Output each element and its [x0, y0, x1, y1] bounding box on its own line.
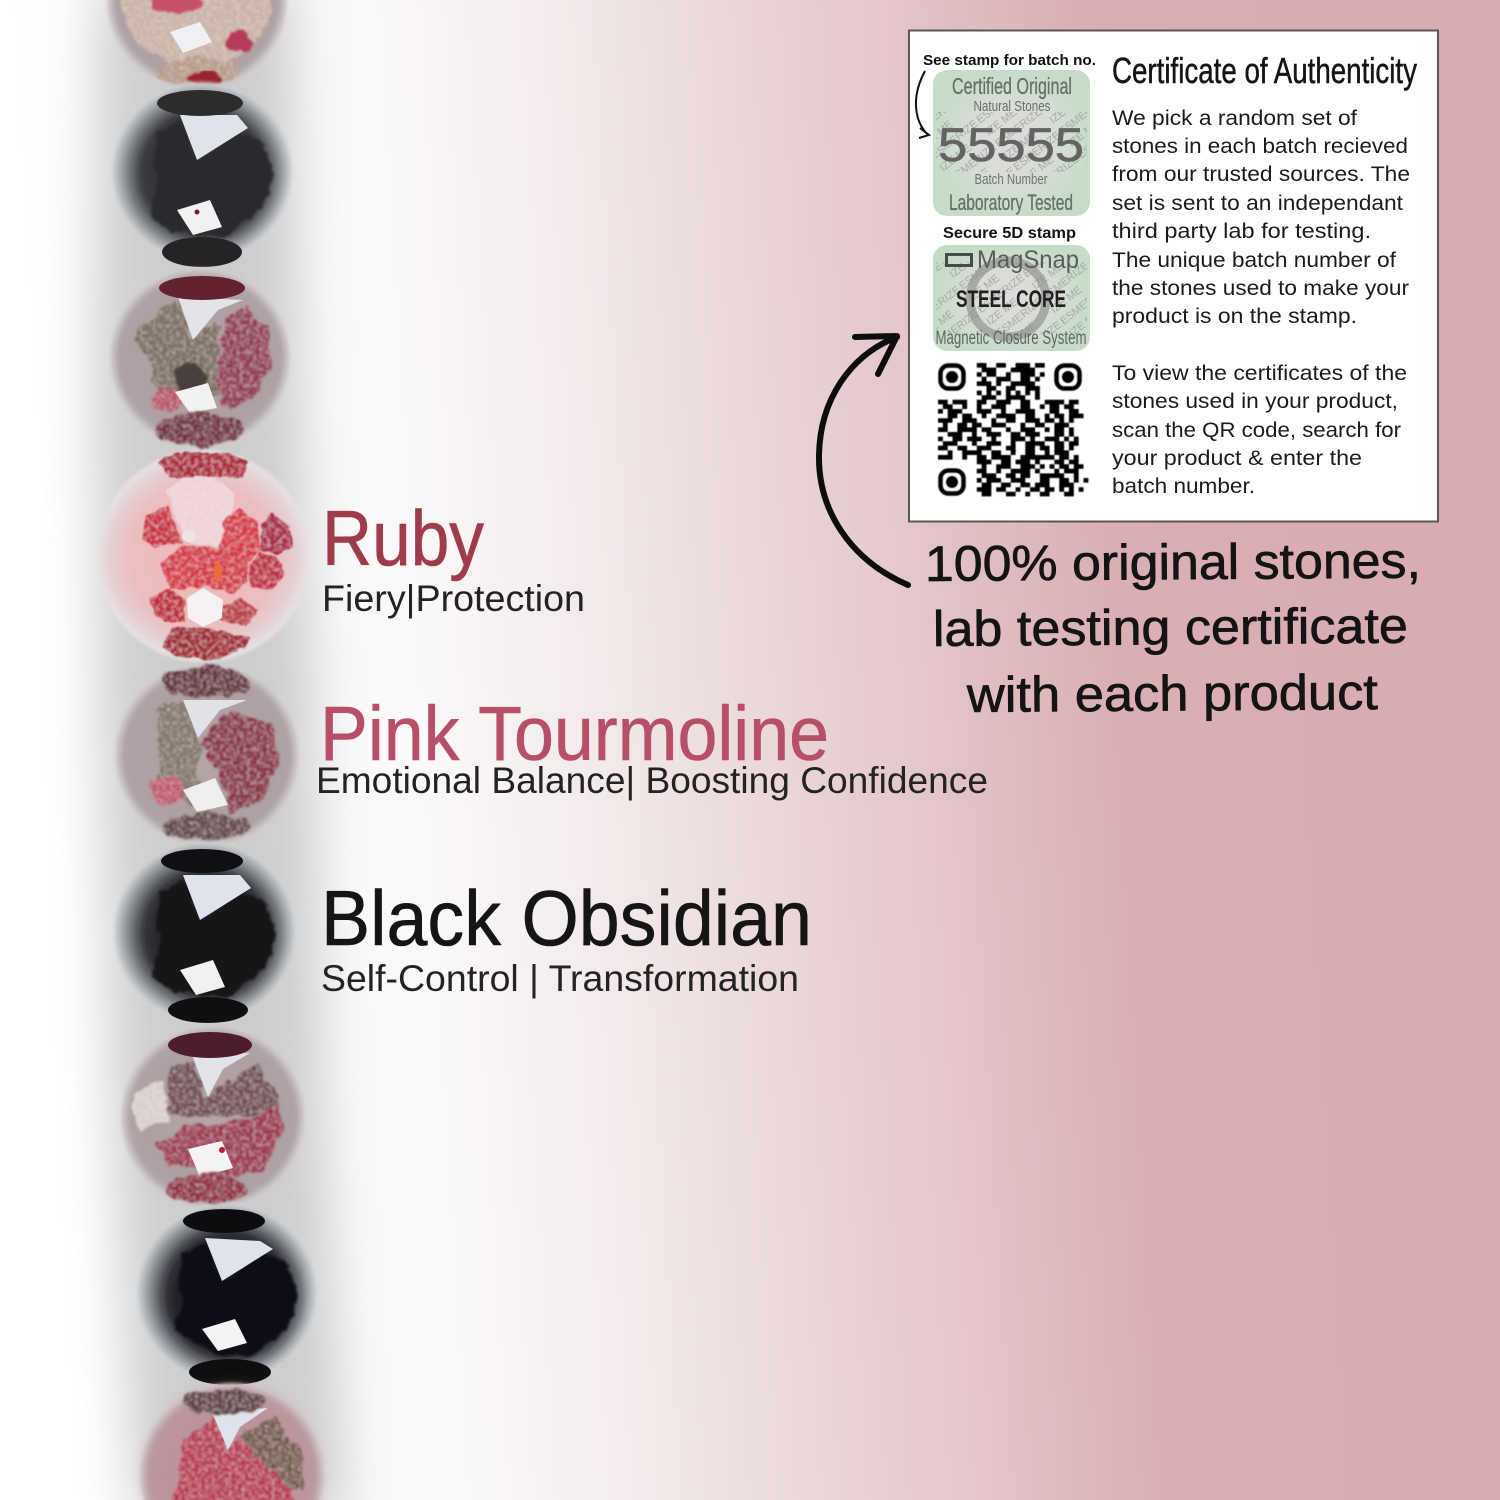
- text block: scan instructions: your product & enter the: [1112, 446, 1362, 470]
- label: Ruby: [322, 494, 585, 619]
- bead strand: [97, 0, 324, 1500]
- caption: see stamp: See stamp for batch no.: [923, 52, 1096, 69]
- bead: top pink tourmaline: [107, 0, 287, 90]
- stamp: steel core: MagSnap: [977, 246, 1079, 274]
- subtitle: Black Obsidian: Self-Control | Transformation: [321, 958, 799, 999]
- heading: certificate of authenticity: Certificate of Authenticity: [1112, 50, 1417, 91]
- stamp: steel core: STEEL CORE: [956, 286, 1066, 313]
- bead: bottom pink tourmaline: [140, 1383, 324, 1500]
- text block: lab testing: [1112, 106, 1410, 328]
- bead: pink tourmaline 2: [110, 268, 290, 448]
- bead: pink tourmaline 4: [121, 1025, 305, 1209]
- text block: scan instructions: batch number.: [1112, 474, 1255, 498]
- text block: scan instructions: To view the certificates of the: [1112, 361, 1407, 385]
- stamp: steel core: Magnetic Closure System: [936, 328, 1086, 349]
- text block: lab testing: third party lab for testing.: [1112, 219, 1371, 243]
- text block: scan instructions: stones used in your product,: [1112, 389, 1398, 413]
- text block: lab testing: We pick a random set of: [1112, 106, 1357, 130]
- stamp: batch number: Natural Stones: [974, 98, 1050, 115]
- subtitle: Pink Tourmoline: Emotional Balance| Boosting Confidence: [316, 760, 988, 801]
- bead: black obsidian 3: [137, 1203, 317, 1385]
- callout: original stones: lab testing certificate: [933, 598, 1408, 657]
- text block: lab testing: stones in each batch recieved: [1112, 134, 1408, 158]
- text block: scan instructions: [1112, 361, 1407, 498]
- QR finder patterns: [940, 366, 1080, 494]
- heading: Pink Tourmoline: Pink Tourmoline: [320, 691, 829, 777]
- arrow: curved pointer to certificate: [819, 336, 908, 585]
- callout: original stones: with each product: [966, 664, 1378, 723]
- stamp: batch number: [933, 70, 1090, 216]
- text block: lab testing: the stones used to make your: [1112, 276, 1409, 300]
- icon: small curved arrow: [916, 71, 929, 138]
- stamp: steel core: [933, 245, 1090, 351]
- subtitle: Ruby: Fiery|Protection: [322, 578, 585, 619]
- bead: pink tourmaline 3: [115, 663, 299, 847]
- heading: Black Obsidian: Black Obsidian: [321, 874, 812, 962]
- text block: lab testing: from our trusted sources. The: [1112, 162, 1410, 186]
- text block: lab testing: product is on the stamp.: [1112, 304, 1357, 328]
- stamp: batch number: Certified Original: [952, 73, 1072, 99]
- label: Pink Tourmoline: [316, 691, 988, 801]
- text block: lab testing: set is sent to an independant: [1112, 191, 1403, 215]
- bead: faceted ruby: [97, 450, 309, 662]
- stamp: batch number: 55555: [938, 118, 1084, 171]
- panel: certificate card: [909, 30, 1438, 522]
- QR code: [938, 365, 1088, 494]
- bead: black obsidian 2: [114, 841, 296, 1023]
- stamp: batch number: Laboratory Tested: [949, 190, 1073, 215]
- callout: original stones: 100% original stones,: [925, 533, 1421, 592]
- bead: black obsidian 1: [112, 82, 292, 267]
- text block: scan instructions: scan the QR code, search for: [1112, 418, 1401, 442]
- heading: Ruby: Ruby: [322, 494, 484, 582]
- caption: secure stamp: Secure 5D stamp: [943, 225, 1076, 242]
- label: Black Obsidian: [321, 874, 812, 999]
- callout: original stones: [925, 533, 1421, 723]
- text block: lab testing: The unique batch number of: [1112, 248, 1396, 272]
- stamp: batch number: Batch Number: [974, 171, 1048, 188]
- bead strand shadow: [95, 0, 345, 1500]
